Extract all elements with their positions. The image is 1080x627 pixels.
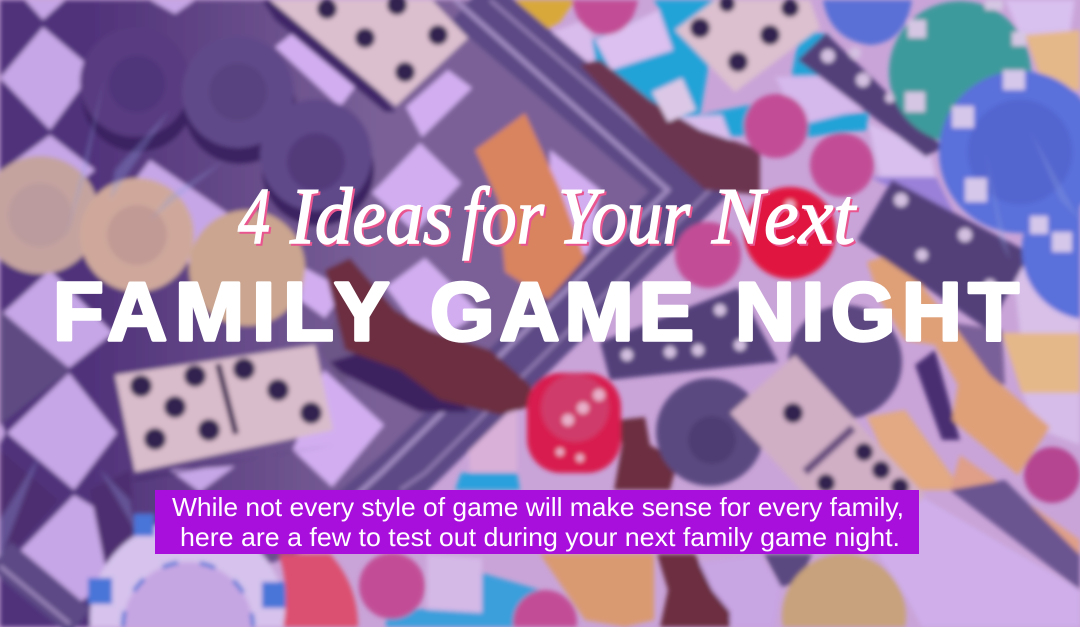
subtitle callout [155, 490, 919, 554]
bottom chips and pieces [88, 514, 906, 627]
game piece: chess shadow [330, 340, 470, 412]
game pieces: dark dominoes [600, 33, 1030, 380]
checkerboard [0, 0, 692, 627]
title: script line: Your [558, 173, 691, 261]
domino pips [621, 47, 996, 361]
title: main line: NIGHT [735, 265, 1019, 358]
game pieces: beige checkers [0, 156, 305, 326]
game piece: domino top [262, 0, 468, 112]
game pieces: dark checkers [80, 27, 374, 226]
game piece: orange pawn right [867, 250, 1050, 475]
title: script line: for [462, 173, 545, 261]
subtitle callout: While not every style of game will make sense for every family, [172, 492, 904, 522]
game pieces: gray checkers [656, 305, 902, 486]
subtitle callout: here are a few to test out during your next family game night. [180, 522, 900, 552]
game piece: domino lower left [115, 345, 335, 480]
game piece: orange chess [475, 113, 585, 300]
faint starburst rays [0, 75, 1080, 560]
casino chips [823, 0, 1080, 319]
game piece: domino right [730, 355, 925, 560]
game piece: domino top right [675, 0, 820, 92]
title: script line: Ideas [289, 173, 452, 261]
title: main line: FAMILY [53, 265, 389, 358]
title: script line: 4 [238, 173, 270, 261]
board frame [0, 0, 710, 624]
game pieces: brown chess [325, 60, 760, 627]
red dice [527, 187, 836, 473]
game piece: small die [652, 78, 696, 122]
right-side game board [386, 0, 1080, 627]
title: main line [53, 265, 1019, 358]
title: main line: GAME [430, 265, 694, 358]
pink checkers [359, 0, 1080, 627]
title: script line: Next [711, 173, 857, 261]
title: script line [238, 173, 857, 261]
